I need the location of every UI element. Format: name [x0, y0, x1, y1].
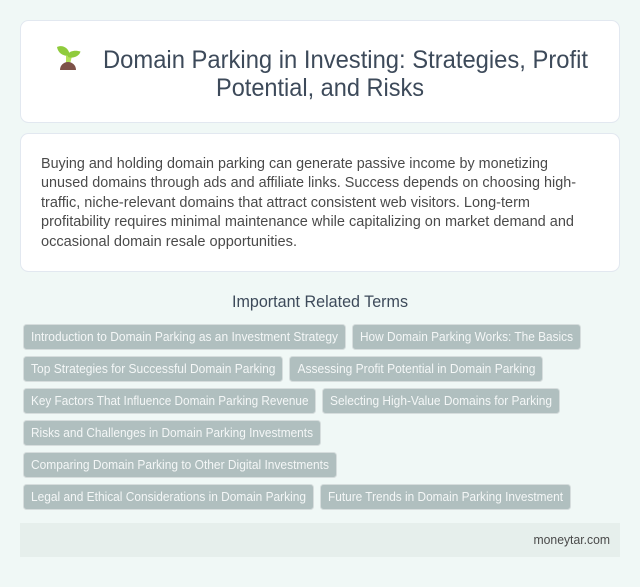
heading: important related terms: Important Related Terms [232, 293, 408, 311]
title [103, 46, 588, 102]
tag: selecting domains: Selecting High-Value Domains for Parking [330, 393, 552, 408]
text block: description: occasional domain resale opportunities. [41, 233, 297, 250]
tag: comparing [24, 452, 336, 478]
tag: legal [24, 484, 314, 510]
tag: risks: Risks and Challenges in Domain Parking Investments [31, 425, 313, 440]
panel: related term tags [24, 324, 580, 510]
tag: selecting domains [322, 388, 560, 414]
tag: future trends: Future Trends in Domain Parking Investment [328, 489, 563, 504]
footer: moneytar.com [534, 532, 610, 547]
icon: seedling [57, 46, 80, 70]
text block: description: unused domains through ads and affiliate links. Success depends on choosing high- [41, 174, 576, 191]
tag: key factors [24, 388, 316, 414]
tag: future trends [320, 484, 570, 510]
title: Domain Parking in Investing: Strategies, Profit [103, 46, 588, 74]
tag: legal: Legal and Ethical Considerations in Domain Parking [31, 489, 306, 504]
panel: description card [20, 134, 620, 272]
tag: top strategies: Top Strategies for Successful Domain Parking [31, 361, 276, 376]
tag: profit potential [290, 356, 542, 382]
tag: profit potential: Assessing Profit Potential in Domain Parking [298, 361, 536, 376]
tag: top strategies [24, 356, 282, 382]
panel: title card [20, 20, 620, 122]
text block: description: profitability requires minimal maintenance while capitalizing on market demand and [41, 213, 574, 230]
tag: how it works [352, 324, 580, 350]
tag: key factors: Key Factors That Influence Domain Parking Revenue [31, 393, 308, 408]
text block: description: Buying and holding domain parking can generate passive income by monetizing [41, 155, 548, 172]
text block: description: traffic, niche-relevant domains that attract consistent web visitors. Long-term [41, 194, 530, 211]
tag: introduction: Introduction to Domain Parking as an Investment Strategy [31, 329, 338, 344]
tag: how it works: How Domain Parking Works: The Basics [360, 329, 573, 344]
tag: introduction [24, 324, 346, 350]
text block: description [41, 155, 576, 250]
tag: comparing: Comparing Domain Parking to Other Digital Investments [31, 457, 329, 472]
footer [20, 523, 620, 557]
title: Potential, and Risks [216, 74, 424, 102]
tag: risks [24, 420, 320, 446]
